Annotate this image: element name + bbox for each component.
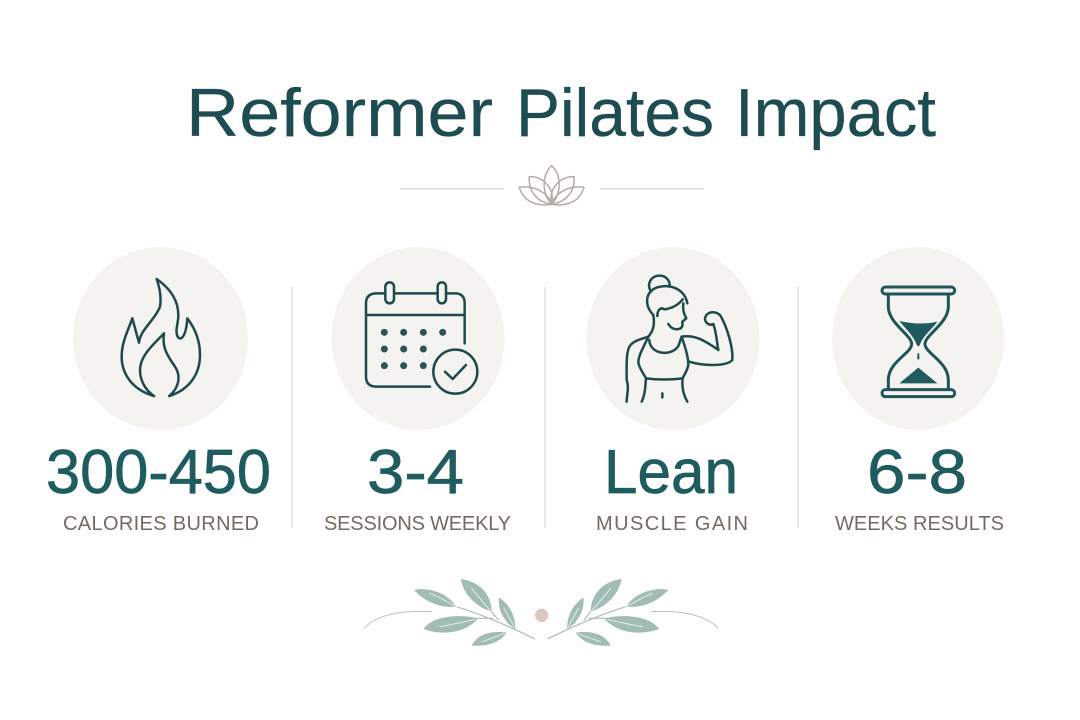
icon circle: sessions (332, 247, 504, 430)
stat: 6-8: 6-8 (867, 438, 967, 507)
icon: woman flexing (627, 276, 732, 402)
right branch (547, 579, 718, 646)
panel: sessions weekly (324, 247, 511, 535)
column dividers (292, 287, 798, 528)
title: Impact (735, 75, 936, 151)
label: muscle gain: MUSCLE GAIN (596, 513, 748, 535)
left branch (364, 579, 535, 646)
title (186, 75, 936, 151)
panel: weeks results (832, 247, 1004, 535)
stat: 3-4: 3-4 (367, 438, 464, 507)
panel: muscle gain (586, 247, 760, 535)
icon: flame (122, 279, 200, 396)
center dot (535, 609, 548, 622)
leaf ornament (364, 579, 718, 646)
icon circle: calories (73, 247, 248, 430)
icon circle: muscle (586, 247, 760, 430)
stat: 300-450: 300-450 (46, 438, 271, 507)
label: sessions weekly: SESSIONS WEEKLY (324, 513, 511, 535)
label: weeks results: WEEKS RESULTS (835, 513, 1004, 535)
icon circle: weeks (832, 247, 1004, 430)
icon: calendar with check (366, 282, 477, 394)
lotus divider (400, 166, 704, 205)
title: Pilates (516, 75, 714, 151)
label: calories burned: CALORIES BURNED (63, 513, 259, 535)
stat: Lean: Lean (604, 438, 738, 507)
title: Reformer (186, 75, 493, 151)
panel: calories burned (46, 247, 271, 535)
icon: hourglass (882, 287, 955, 397)
